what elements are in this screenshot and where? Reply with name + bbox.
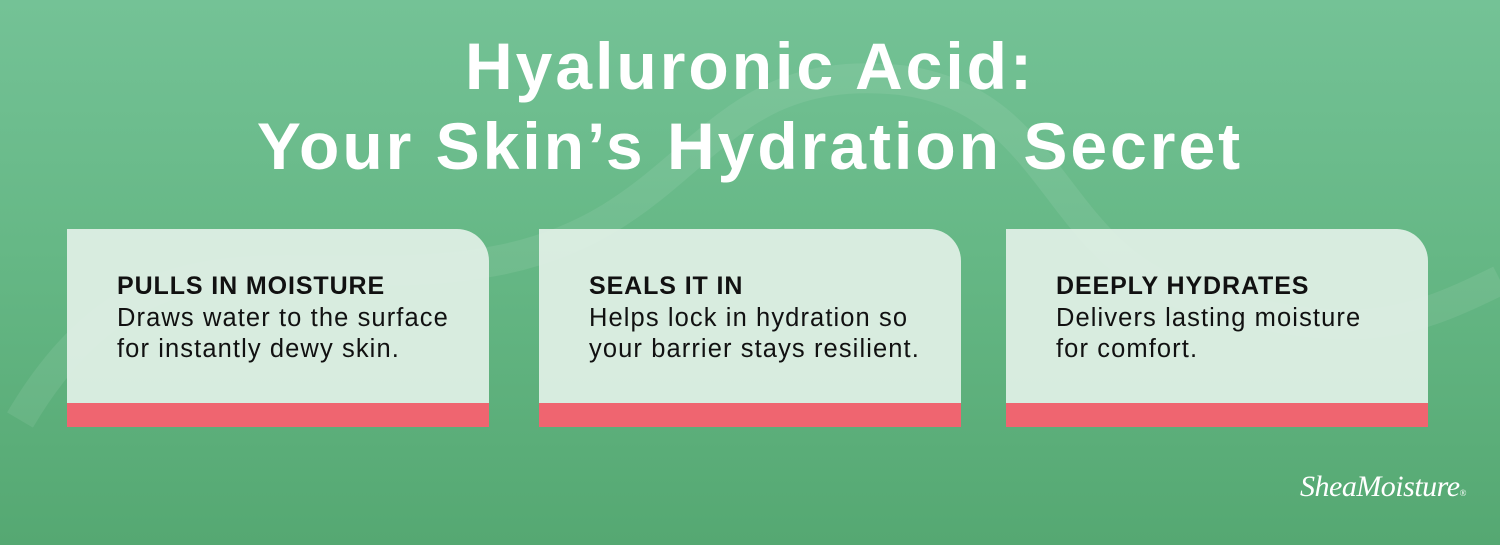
title: Your Skin’s Hydration Secret (257, 109, 1243, 183)
text block (589, 304, 920, 363)
text block: for comfort. (1056, 335, 1198, 363)
text block: Helps lock in hydration so (589, 304, 908, 332)
logo: SheaMoisture® (1300, 470, 1466, 503)
accent bar (539, 403, 961, 427)
accent bar (1006, 403, 1428, 427)
text block: for instantly dewy skin. (117, 335, 400, 363)
text block: your barrier stays resilient. (589, 335, 920, 363)
title: Hyaluronic Acid: (465, 29, 1035, 103)
heading: SEALS IT IN (589, 272, 743, 300)
text block: Draws water to the surface (117, 304, 449, 332)
panel: seals it in (539, 229, 961, 427)
heading: PULLS IN MOISTURE (117, 272, 385, 300)
text block (1056, 304, 1361, 363)
text block (117, 304, 449, 363)
panel: deeply hydrates (1006, 229, 1428, 427)
heading: DEEPLY HYDRATES (1056, 272, 1309, 300)
panel: pulls in moisture (67, 229, 489, 427)
text block: Delivers lasting moisture (1056, 304, 1361, 332)
title (257, 29, 1243, 183)
accent bar (67, 403, 489, 427)
